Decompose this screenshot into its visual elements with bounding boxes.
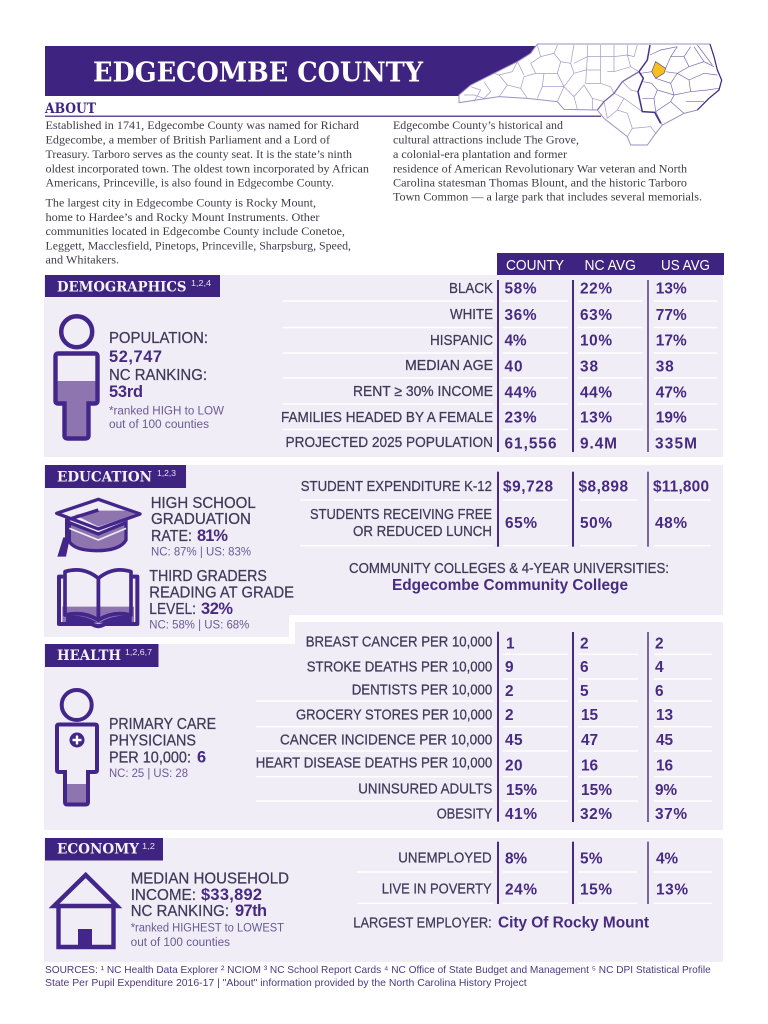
third grade reading: NC: 58% | US: 68% (149, 620, 249, 632)
third grade reading (149, 568, 294, 632)
table: health: 9% (655, 782, 677, 799)
section label: economy: 1,2 (142, 841, 155, 851)
about text: right column (393, 119, 702, 204)
table: demographics: 19% (656, 410, 687, 427)
population stats: NC RANKING: (109, 367, 207, 384)
table: health: 37% (655, 806, 687, 823)
graduation rate (151, 495, 256, 559)
graduation rate: HIGH SCHOOL (151, 495, 256, 512)
third grade reading: READING AT GRADE (149, 585, 294, 602)
table: economy: 24% (505, 881, 537, 898)
about text: left column (46, 119, 369, 266)
table: demographics: 44% (504, 384, 537, 402)
table: education (300, 472, 711, 547)
income stat: MEDIAN HOUSEHOLD (131, 870, 289, 887)
map: North Carolina counties (459, 44, 722, 145)
section label: health: 1,2,6,7 (125, 647, 152, 657)
section label: demographics: 1,2,4 (191, 278, 211, 288)
icon: person with medical cross (57, 690, 97, 804)
table: demographics: 44% (580, 384, 612, 402)
table column headers: US AVG (661, 258, 710, 274)
about text: left column: communities located in Edgecombe County include Conetoe, (46, 225, 345, 238)
table: health: 6 (655, 683, 664, 700)
table: demographics: MEDIAN AGE (405, 358, 493, 374)
table column headers: NC AVG (584, 258, 636, 274)
icon: graduation cap (57, 499, 140, 557)
section label: education (45, 465, 186, 488)
table: health: 5 (580, 683, 589, 700)
table: economy (357, 842, 712, 904)
table: demographics: 17% (656, 333, 687, 350)
third grade reading: THIRD GRADERS (149, 568, 267, 585)
about text: right column: Carolina statesman Thomas Blount, and the historic Tarboro (393, 176, 687, 190)
primary care stat: PHYSICIANS (109, 733, 196, 750)
graduation rate: NC: 87% | US: 83% (151, 547, 251, 559)
table: health: GROCERY STORES PER 10,000 (296, 707, 492, 723)
third grade reading: 32% (201, 600, 233, 618)
about text: right column: Edgecombe County’s historical and (393, 119, 563, 132)
table: health: UNINSURED ADULTS (358, 782, 492, 798)
primary care stat (109, 716, 216, 780)
table: economy: UNEMPLOYED (398, 851, 492, 867)
table: demographics: 38 (580, 358, 598, 376)
table: health: 45 (505, 732, 523, 749)
table: demographics: 40 (504, 358, 522, 376)
table: demographics: FAMILIES HEADED BY A FEMALE (281, 410, 493, 426)
table: economy: LIVE IN POVERTY (382, 881, 492, 897)
income stat: out of 100 counties (131, 937, 230, 949)
largest employer (353, 915, 649, 932)
panel: health (44, 622, 723, 830)
income stat (131, 870, 289, 949)
section label: education: EDUCATION (57, 470, 152, 486)
about text: left column: Edgecombe, a member of British Parliament and a Lord of (46, 134, 330, 146)
table: health: 2 (655, 635, 664, 652)
table: demographics: 77% (656, 307, 687, 324)
table: demographics: 63% (580, 307, 612, 324)
icon: person population fill (56, 316, 98, 438)
income stat: *ranked HIGHEST to LOWEST (131, 923, 284, 935)
about heading: ABOUT (44, 101, 97, 117)
icon: house (54, 875, 117, 948)
table: education: OR REDUCED LUNCH (353, 524, 492, 540)
title banner (45, 46, 537, 96)
table: demographics: 58% (504, 280, 537, 298)
highlighted county: Edgecombe (652, 62, 666, 78)
table: demographics: 36% (504, 307, 537, 324)
table: health: 2 (505, 683, 514, 700)
colleges: Edgecombe Community College (392, 577, 628, 594)
table: demographics: 13% (580, 410, 612, 427)
table: health: 32% (580, 806, 612, 823)
table: health: BREAST CANCER PER 10,000 (306, 635, 492, 651)
table: health: CANCER INCIDENCE PER 10,000 (280, 732, 492, 748)
table: health: STROKE DEATHS PER 10,000 (307, 660, 492, 676)
income stat: $33,892 (201, 886, 262, 904)
table: health: 41% (505, 806, 537, 823)
table: education: 65% (505, 515, 537, 532)
about text: left column: Americans, Princeville, is also found in Edgecombe County. (46, 176, 334, 190)
population stats: out of 100 counties (109, 419, 209, 431)
table: demographics: HISPANIC (430, 333, 493, 349)
sources: State Per Pupil Expenditure 2016-17 | "About" information provided by the North Carolina History Project (45, 977, 527, 989)
colleges (349, 561, 669, 594)
table: demographics: PROJECTED 2025 POPULATION (286, 435, 493, 451)
table: education: $8,898 (578, 479, 628, 496)
section label: economy: ECONOMY (57, 842, 139, 858)
table: economy: 13% (656, 881, 688, 898)
table: health: 9 (505, 659, 514, 676)
income stat: INCOME: (131, 887, 196, 904)
income stat: NC RANKING: (131, 903, 229, 920)
section label: economy (45, 838, 163, 860)
table: education: $11,800 (653, 479, 709, 496)
about text: left column: Treasury. Tarboro serves as the county seat. It is the state’s ninth (46, 148, 352, 161)
about text: left column: Established in 1741, Edgecombe County was named for Richard (46, 119, 359, 132)
section label: demographics: DEMOGRAPHICS (57, 280, 186, 296)
table: health: 4 (655, 659, 664, 676)
table: health: 45 (656, 732, 673, 749)
icon: open book (59, 570, 137, 626)
table: health: HEART DISEASE DEATHS PER 10,000 (256, 756, 492, 772)
about text: left column: and Whitakers. (46, 254, 119, 266)
table: demographics: WHITE (450, 307, 493, 323)
table: health: 13 (656, 707, 673, 724)
primary care stat: 6 (197, 748, 206, 766)
about text: left column: The largest city in Edgecombe County is Rocky Mount, (46, 196, 316, 210)
population stats: 53rd (109, 383, 143, 401)
table: demographics: 38 (656, 358, 674, 376)
table: demographics: 22% (580, 280, 612, 298)
table: demographics: BLACK (449, 281, 493, 297)
section label: health (45, 644, 158, 667)
about text: left column: home to Hardee’s and Rocky Mount Instruments. Other (46, 211, 320, 224)
table: demographics: 47% (656, 384, 687, 402)
table: health: 16 (656, 758, 673, 775)
section label: education: 1,2,3 (157, 468, 176, 478)
primary care stat: NC: 25 | US: 28 (109, 768, 188, 780)
panel: demographics (44, 275, 723, 457)
table: health: 15 (581, 707, 598, 724)
about text: right column: Town Common — a large park that includes several memorials. (393, 190, 702, 204)
table: demographics: 9.4M (580, 436, 617, 453)
table: health: 16 (581, 758, 598, 775)
table column headers (497, 253, 724, 275)
population stats (109, 330, 224, 431)
table: economy: 4% (656, 850, 678, 867)
income stat: 97th (235, 902, 267, 920)
table: health: OBESITY (437, 806, 493, 822)
table: demographics: 61,556 (504, 436, 556, 453)
panel: education (44, 465, 723, 637)
table: health (256, 632, 712, 823)
sources (45, 964, 711, 989)
title banner: EDGECOMBE COUNTY (93, 56, 423, 88)
table: health: 1 (506, 635, 515, 652)
table: demographics: 335M (655, 436, 697, 453)
section label: demographics (45, 275, 220, 297)
table: health: 6 (580, 659, 589, 676)
table: health: 20 (505, 758, 522, 775)
colleges: COMMUNITY COLLEGES & 4-YEAR UNIVERSITIES: (349, 561, 669, 577)
table: health: DENTISTS PER 10,000 (352, 682, 492, 698)
table: education: STUDENTS RECEIVING FREE (310, 507, 492, 523)
table: economy: 5% (580, 850, 603, 867)
table: health: 47 (581, 732, 598, 749)
sources: SOURCES: ¹ NC Health Data Explorer ² NCIOM ³ NC School Report Cards ⁴ NC Office of State Budget and Management ⁵ NC DPI Statistical Profile (45, 964, 711, 976)
table: demographics: 13% (656, 280, 687, 298)
table: education: $9,728 (503, 479, 553, 496)
largest employer: City Of Rocky Mount (498, 915, 649, 932)
panel: economy (44, 838, 723, 962)
about text: right column: a colonial-era plantation and former (393, 148, 567, 161)
table: health: 15% (506, 782, 537, 799)
table: health: 2 (505, 707, 514, 724)
population stats: POPULATION: (109, 330, 208, 347)
primary care stat: PER 10,000: (109, 749, 191, 766)
graduation rate: 81% (197, 527, 228, 545)
table: education: 48% (655, 515, 687, 532)
table column headers: COUNTY (506, 258, 564, 274)
graduation rate: GRADUATION (151, 511, 251, 528)
table: education: STUDENT EXPENDITURE K-12 (301, 479, 492, 495)
table: demographics: 10% (580, 333, 612, 350)
population stats: 52,747 (109, 348, 162, 366)
largest employer: LARGEST EMPLOYER: (353, 916, 492, 932)
about text: right column: cultural attractions include The Grove, (393, 134, 579, 146)
table: education: 50% (580, 515, 612, 532)
about text: left column: Leggett, Macclesfield, Pinetops, Princeville, Sharpsburg, Speed, (46, 240, 351, 252)
table: demographics: RENT ≥ 30% INCOME (353, 384, 493, 400)
table: demographics (281, 280, 717, 453)
table: health: 2 (580, 635, 589, 652)
population stats: *ranked HIGH to LOW (109, 406, 224, 418)
third grade reading: LEVEL: (149, 601, 196, 618)
table: economy: 15% (580, 881, 612, 898)
table: economy: 8% (505, 850, 527, 867)
table: demographics: 4% (504, 333, 527, 350)
table: demographics: 23% (504, 410, 537, 427)
about text: right column: residence of American Revolutionary War veteran and North (393, 162, 687, 176)
table: health: 15% (581, 782, 612, 799)
about text: left column: oldest incorporated town. The oldest town incorporated by African (46, 162, 369, 176)
primary care stat: PRIMARY CARE (109, 716, 216, 733)
graduation rate: RATE: (151, 528, 192, 545)
section label: health: HEALTH (57, 648, 121, 664)
